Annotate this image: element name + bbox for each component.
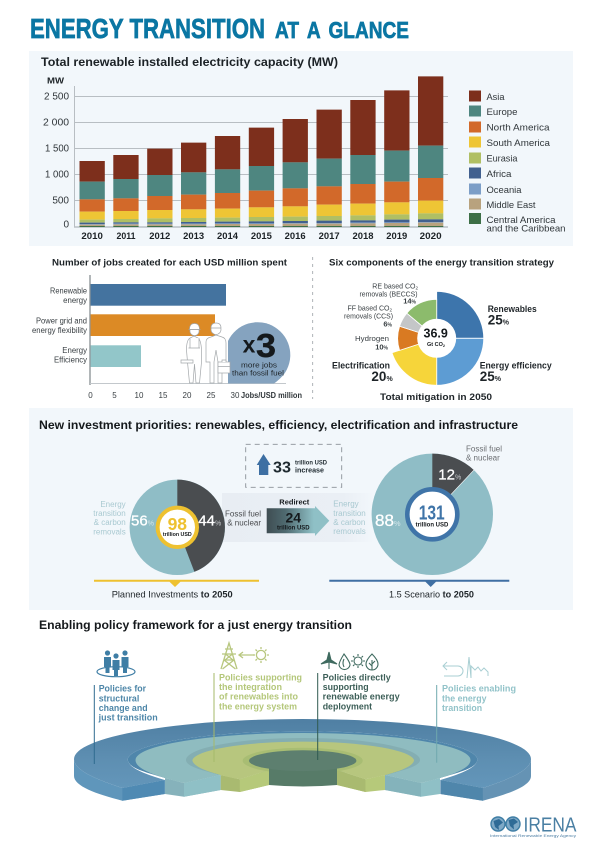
divider between panels (312, 257, 314, 399)
text: integration: Policies supporting (219, 672, 302, 682)
label: FF based removals: 6% (383, 320, 393, 329)
label: FF based removals: removals (CCS) (344, 313, 393, 320)
heading: six components: Six components of the energy transition strategy (329, 258, 555, 268)
legend: Eurasia (486, 154, 518, 164)
label: energy efficiency: 25% (480, 369, 502, 384)
label: FF based removals: 2 (389, 307, 392, 312)
x axis labels: 2014 (217, 231, 238, 241)
axis tick labels (88, 391, 302, 400)
label: hydrogen (355, 334, 389, 352)
legend: Africa (486, 169, 512, 180)
axis tick labels: 20 (183, 391, 192, 400)
policy group: structural change (94, 650, 158, 764)
text: direct support: Policies directly (323, 672, 391, 682)
label: FF based removals (344, 305, 393, 329)
y axis labels: 0 (63, 220, 69, 230)
x axis labels: 2015 (251, 231, 272, 241)
callout: x3 more jobs: more jobs (241, 360, 277, 370)
bar labels: Energy (62, 346, 87, 355)
caption: 1.5 scenario: 1.5 Scenario to 2050 (389, 590, 474, 601)
y axis labels: 1 000 (45, 170, 69, 180)
label: renewables (488, 304, 537, 328)
policy group: direct support (318, 652, 400, 760)
text: direct support: renewable energy (323, 692, 400, 702)
label: electrification: 20% (371, 369, 393, 384)
icon: wind, water, sun, leaf (321, 652, 378, 670)
x axis labels: 2020 (420, 231, 442, 241)
label: energy transition right: removals (333, 527, 366, 536)
label: energy efficiency (480, 360, 552, 384)
label: energy transition left (93, 500, 126, 536)
text: integration: the integration (219, 682, 282, 692)
label: fossil fuel right: Fossil fuel (466, 444, 502, 453)
pie: planned investments: 98 (168, 514, 187, 534)
grey redirect band (222, 493, 374, 542)
bar labels: energy flexibility (32, 326, 87, 335)
caption: 1.5 scenario (329, 580, 509, 601)
pie: 1.5 scenario (372, 454, 493, 575)
label: RE based removals: 14% (403, 297, 417, 306)
label: RE based removals: 2 (415, 285, 418, 290)
label: energy transition right: transition (333, 509, 366, 518)
label: energy transition left: Energy (100, 500, 126, 509)
legend: Middle East (486, 200, 536, 211)
label: hydrogen: Hydrogen (355, 334, 389, 343)
y axis labels (43, 76, 69, 230)
legend: North America (486, 122, 550, 134)
diagram: concentric policy rings (74, 719, 531, 801)
x axis labels: 2019 (386, 231, 407, 241)
legend: Oceania (486, 185, 522, 196)
arrow: redirect 24 trillion: Redirect (279, 498, 310, 507)
axis tick labels: 30 (231, 391, 240, 400)
axis tick labels: 5 (112, 391, 117, 400)
text: enabling: Policies enabling (442, 684, 516, 694)
text: integration (219, 672, 302, 711)
heading: investment priorities: New investment priorities: renewables, efficiency, electrification and infrastructure (39, 420, 518, 432)
text: direct support: supporting (323, 682, 369, 692)
text: enabling: transition (442, 703, 482, 713)
arrow: redirect 24 trillion: trillion USD (277, 526, 310, 532)
axis tick labels: 15 (159, 391, 168, 400)
pie: planned investments: 56% (131, 513, 154, 530)
donut centre value: 36.9 (424, 327, 448, 341)
donut centre value (424, 327, 448, 348)
bar labels: Efficiency (54, 356, 87, 364)
text: direct support (323, 672, 400, 711)
caption: planned investments: Planned Investments to 2050 (112, 590, 233, 601)
panel: investment priorities (29, 408, 573, 610)
bar labels: Renewable (50, 286, 87, 296)
legend: South America (486, 138, 551, 149)
arrow: redirect 24 trillion: 24 (286, 510, 301, 526)
pie: planned investments: trillion USD (163, 532, 192, 538)
donut chart (392, 291, 484, 385)
label: renewables: Renewables (488, 304, 537, 315)
text: direct support: deployment (323, 701, 372, 711)
legend: Asia (486, 92, 505, 103)
caption: planned investments (94, 580, 259, 601)
heading: jobs: Number of jobs created for each USD million spent (52, 258, 288, 268)
x axis labels: 2016 (285, 231, 306, 241)
label: energy transition left: transition (93, 509, 126, 518)
label: energy transition left: & carbon (94, 518, 126, 527)
x axis labels: 2011 (116, 231, 136, 241)
x axis labels (81, 231, 442, 241)
text: enabling (442, 684, 516, 713)
title: AT A GLANCE (275, 17, 409, 43)
policy group: enabling (437, 657, 516, 763)
callout: x3 more jobs: x (243, 332, 256, 358)
heading: policy framework: Enabling policy framework for a just energy transition (39, 620, 352, 632)
y axis labels: MW (47, 76, 65, 86)
label: fossil fuel left: & nuclear (227, 518, 261, 527)
pie: planned investments (130, 480, 225, 575)
axis tick labels: Jobs/USD million (241, 391, 302, 400)
label: electrification (332, 360, 393, 384)
legend (469, 90, 566, 234)
text: structural change: just transition (98, 713, 158, 723)
y axis labels: 1 500 (45, 144, 69, 154)
legend: and the Caribbean (486, 224, 566, 234)
pie: 1.5 scenario: trillion USD (416, 523, 449, 529)
label: electrification: Electrification (332, 360, 390, 371)
callout: 33 trillion increase (246, 444, 342, 487)
y axis labels: 500 (52, 196, 69, 206)
x axis labels: 2010 (81, 231, 103, 241)
callout: 33 trillion increase: increase (295, 465, 324, 474)
label: renewables: 25% (488, 312, 510, 328)
icon: people (97, 650, 135, 677)
pie: 1.5 scenario: 12% (438, 466, 461, 483)
label: fossil fuel left: Fossil fuel (225, 509, 261, 518)
text: structural change: Policies for (99, 684, 147, 694)
label: energy transition right: & carbon (333, 518, 365, 527)
legend: Central America (486, 215, 556, 226)
icon: workers (181, 323, 230, 383)
text: integration: the energy system (219, 701, 297, 711)
title: ENERGY TRANSITION (30, 13, 265, 44)
callout: 33 trillion increase: trillion USD (295, 461, 328, 467)
label: fossil fuel right: & nuclear (466, 454, 500, 463)
x axis labels: 2012 (149, 231, 170, 241)
text: structural change (98, 684, 158, 723)
x axis labels: 2017 (319, 231, 340, 241)
arrow: redirect 24 trillion (267, 498, 329, 536)
callout: 33 trillion increase: 33 (273, 459, 291, 476)
legend: Europe (486, 107, 518, 118)
callout: x3 more jobs (228, 322, 290, 384)
label: RE based removals: removals (BECCS) (360, 292, 418, 299)
icon: transition arrow and factory (443, 657, 488, 678)
horizontal bar chart (90, 275, 286, 385)
pie: 1.5 scenario: 88% (375, 511, 401, 530)
axis tick labels: 0 (88, 391, 93, 400)
bar labels: Power grid and (36, 316, 87, 326)
bar labels: energy (63, 296, 87, 305)
pie: 1.5 scenario: 131 (419, 502, 445, 524)
donut centre value: 2 (443, 344, 445, 348)
icon: pylon and sun (221, 643, 269, 669)
policy group: integration (214, 643, 302, 762)
logo: IRENA: International Renewable Energy Agency (490, 834, 576, 838)
x axis labels: 2013 (183, 231, 204, 241)
caption: total mitigation: Total mitigation in 2050 (380, 392, 492, 403)
logo: IRENA (490, 815, 577, 838)
label: FF based removals: FF based CO (347, 305, 389, 312)
callout: x3 more jobs: 3 (256, 327, 276, 364)
axis tick labels: 10 (135, 391, 144, 400)
stacked bar chart (74, 76, 448, 227)
label: RE based removals (360, 283, 418, 306)
text: enabling: the energy (442, 693, 487, 703)
panel: six components (329, 258, 555, 403)
y axis labels: 2 000 (43, 118, 69, 128)
donut centre value: Gt CO (427, 342, 443, 348)
logo: IRENA: IRENA (524, 815, 577, 837)
panel: renewable capacity (29, 51, 573, 246)
label: energy transition right: Energy (333, 500, 359, 509)
text: structural change: structural (99, 693, 139, 703)
text: integration: of renewables into (219, 692, 299, 702)
label: fossil fuel right (466, 444, 502, 463)
pie: planned investments: 44% (198, 513, 221, 530)
y axis labels: 2 500 (44, 92, 69, 102)
callout: x3 more jobs: than fossil fuel (232, 368, 284, 378)
label: hydrogen: 10% (375, 343, 389, 352)
label: fossil fuel left (225, 509, 261, 527)
label: energy transition right (333, 500, 366, 536)
heading: renewable capacity: Total renewable installed electricity capacity (MW) (41, 57, 338, 69)
panel: jobs per USD million (32, 258, 302, 400)
x axis labels: 2018 (352, 231, 374, 241)
label: energy transition left: removals (93, 527, 126, 536)
text: structural change: change and (99, 703, 148, 713)
bar labels (32, 286, 87, 364)
label: energy efficiency: Energy efficiency (480, 360, 552, 371)
axis tick labels: 25 (207, 391, 216, 400)
label: RE based removals: RE based CO (372, 283, 415, 290)
